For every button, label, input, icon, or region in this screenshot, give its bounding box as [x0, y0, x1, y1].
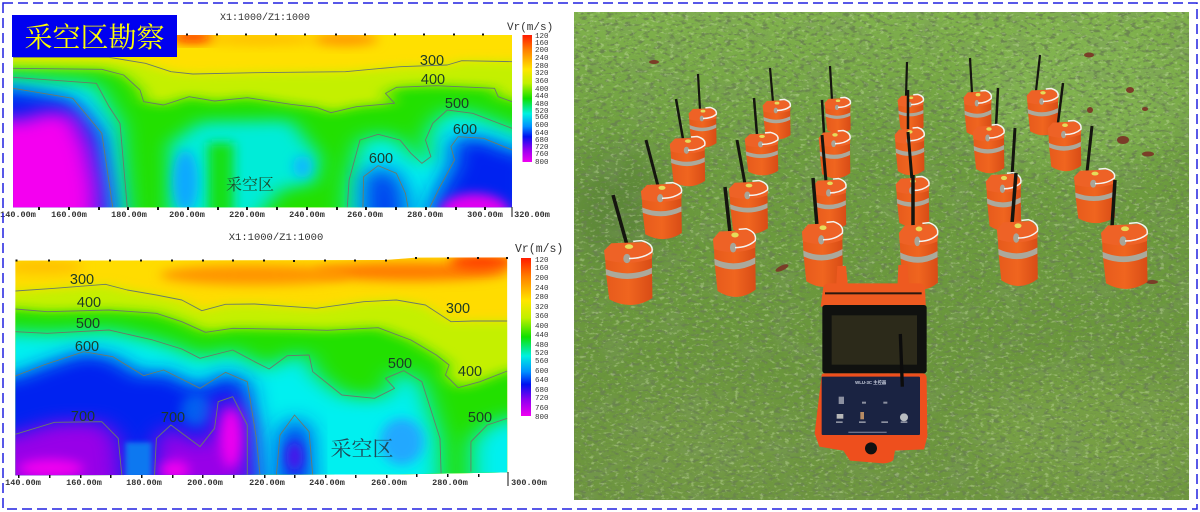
upper chart x-axis labels: 240.00m	[289, 210, 325, 220]
main control unit case	[815, 265, 927, 463]
case lid latches	[836, 265, 903, 284]
upper chart mined-out zone label: 采空区	[226, 176, 274, 194]
upper chart colour legend: 320	[535, 70, 549, 78]
lower chart colour legend: Vr(m/s)	[515, 243, 563, 256]
lower chart colour legend: 560	[535, 358, 549, 366]
upper chart x-axis labels: 180.00m	[111, 210, 147, 220]
upper chart x-axis labels: 280.00m	[407, 210, 443, 220]
upper chart colour legend: 800	[535, 159, 549, 167]
lower chart x-axis labels: 240.00m	[309, 478, 345, 488]
upper chart contour labels: 600	[453, 122, 477, 138]
sensor row 2, 1	[641, 140, 682, 239]
lower chart colour legend: 160	[535, 265, 549, 273]
screen frame	[822, 305, 927, 373]
sensor row 3, 3	[819, 100, 851, 178]
upper chart x-axis labels: 200.00m	[169, 210, 205, 220]
sensor front row, 2	[713, 187, 756, 297]
lower chart colour legend: 280	[535, 294, 549, 302]
upper chart colour legend: 280	[535, 63, 549, 71]
sensor row 3, 5	[973, 88, 1005, 173]
control panel: WLU-3C 主控器	[855, 379, 887, 386]
grass background	[570, 12, 1200, 500]
lower chart station markers and axis ticks	[16, 257, 508, 486]
lower chart colour legend: 240	[535, 285, 549, 293]
upper chart x-axis labels: 300.00m	[467, 210, 503, 220]
upper chart colour legend: 560	[535, 114, 549, 122]
sensor row 3, 6	[1048, 83, 1082, 171]
lower chart x-axis labels: 220.00m	[249, 478, 285, 488]
sensor row 2, 4	[896, 132, 930, 227]
upper chart colour legend: 680	[535, 137, 549, 145]
sensor row 2, 6	[1074, 126, 1115, 223]
lower chart contour labels: 500	[468, 410, 492, 426]
upper chart colour legend: 440	[535, 93, 549, 101]
upper chart x-axis labels: 320.00m	[514, 210, 550, 220]
lower chart colour legend: 480	[535, 342, 549, 350]
upper chart x-axis labels: 220.00m	[229, 210, 265, 220]
lower chart x-axis labels: 300.00m	[511, 478, 547, 488]
sensor row 3, 2	[745, 98, 779, 175]
upper seismic velocity section chart	[0, 12, 552, 217]
lower chart colour legend: 800	[535, 414, 549, 422]
upper chart scale title: X1:1000/Z1:1000	[220, 12, 310, 24]
sensor row 2, 5	[986, 128, 1021, 231]
upper chart contour labels: 600	[369, 151, 393, 167]
lower chart contour labels	[70, 272, 492, 426]
lower chart colour legend: 520	[535, 350, 549, 358]
upper chart colour legend: 640	[535, 130, 549, 138]
control panel	[822, 377, 920, 435]
lower chart colour legend: 760	[535, 405, 549, 413]
sensor row 4, 4	[898, 62, 924, 131]
lower chart colour legend: 440	[535, 332, 549, 340]
sensor row 2, 2	[729, 140, 768, 234]
lower chart colour legend: 400	[535, 323, 549, 331]
upper chart colour legend: Vr(m/s)	[507, 22, 553, 34]
upper chart x-axis labels: 140.00m	[0, 210, 36, 220]
upper chart colour legend: 520	[535, 108, 549, 116]
upper chart colour legend	[507, 22, 553, 167]
lower chart colour legend: 720	[535, 395, 549, 403]
lower chart contour labels: 300	[446, 301, 470, 317]
lower chart x-axis labels: 200.00m	[187, 478, 223, 488]
upper chart colour legend: 200	[535, 47, 549, 55]
upper chart contour labels: 500	[445, 96, 469, 112]
lower chart contour labels: 700	[71, 409, 95, 425]
case base	[815, 373, 927, 463]
upper chart colour legend: 480	[535, 101, 549, 109]
photo: seismic instruments on grass	[570, 12, 1200, 500]
upper chart contour labels: 400	[421, 72, 445, 88]
lower seismic velocity section chart	[0, 232, 563, 498]
upper chart colour legend: 760	[535, 151, 549, 159]
lower chart colour legend: 640	[535, 377, 549, 385]
upper chart colour legend: 400	[535, 86, 549, 94]
lower chart x-axis labels: 280.00m	[432, 478, 468, 488]
sensor row 3, 4	[895, 90, 925, 175]
lower chart colour legend: 320	[535, 304, 549, 312]
sensor row 4 far, 1	[689, 74, 717, 147]
title badge: 采空区勘察	[24, 22, 165, 54]
lower chart x-axis labels: 140.00m	[5, 478, 41, 488]
lower chart contour labels: 400	[77, 295, 101, 311]
upper chart colour legend: 120	[535, 33, 549, 41]
upper chart colour legend: 240	[535, 55, 549, 63]
lower chart heatmap with contours	[15, 257, 508, 476]
sensor front row, 3	[802, 178, 843, 287]
upper chart colour legend: 160	[535, 40, 549, 48]
lower chart contour labels: 500	[76, 316, 100, 332]
upper chart x-axis labels	[0, 210, 550, 220]
upper chart contour labels: 300	[420, 53, 444, 69]
upper chart x-axis labels: 160.00m	[51, 210, 87, 220]
lower chart colour legend: 120	[535, 257, 549, 265]
sensor row 4, 6	[1027, 55, 1059, 135]
sensor front row, 5	[997, 173, 1038, 286]
lower chart colour legend: 360	[535, 313, 549, 321]
case lid	[821, 283, 926, 310]
sensor row 3, 1	[670, 99, 705, 186]
lower chart contour labels: 700	[161, 410, 185, 426]
sensor front row, 6	[1101, 180, 1148, 289]
lower chart colour legend: 600	[535, 368, 549, 376]
fallen leaves	[649, 52, 1158, 284]
upper chart heatmap with contours	[13, 35, 512, 208]
case front latch	[865, 442, 877, 454]
title badge	[12, 15, 177, 57]
upper chart x-axis labels: 260.00m	[347, 210, 383, 220]
screen	[832, 315, 917, 365]
lower chart colour legend: 200	[535, 275, 549, 283]
upper chart station markers and axis ticks	[38, 34, 512, 217]
upper chart colour legend: 600	[535, 122, 549, 130]
lower chart scale title: X1:1000/Z1:1000	[229, 232, 323, 244]
lower chart contour labels: 600	[75, 339, 99, 355]
lower chart x-axis labels: 260.00m	[371, 478, 407, 488]
sensor front row, 1	[604, 195, 653, 305]
sensor row 4, 2	[763, 68, 791, 139]
lower chart x-axis labels: 160.00m	[66, 478, 102, 488]
lower chart contour labels: 500	[388, 356, 412, 372]
lower chart contour labels: 300	[70, 272, 94, 288]
sensor row 4, 5	[964, 58, 992, 136]
lower chart colour legend: 680	[535, 387, 549, 395]
lower chart contour labels: 400	[458, 364, 482, 380]
lower chart x-axis labels: 180.00m	[126, 478, 162, 488]
upper chart colour legend: 360	[535, 78, 549, 86]
sensor front row, 4	[899, 175, 938, 290]
lower chart colour legend	[515, 243, 563, 422]
whip antenna	[900, 334, 902, 387]
sensor row 2, 3	[813, 135, 847, 230]
upper chart contour labels	[369, 53, 477, 167]
lower chart x-axis labels	[5, 478, 547, 488]
upper chart colour legend: 720	[535, 144, 549, 152]
sensor row 4, 3	[825, 66, 851, 133]
lower chart mined-out zone label: 采空区	[330, 437, 394, 461]
